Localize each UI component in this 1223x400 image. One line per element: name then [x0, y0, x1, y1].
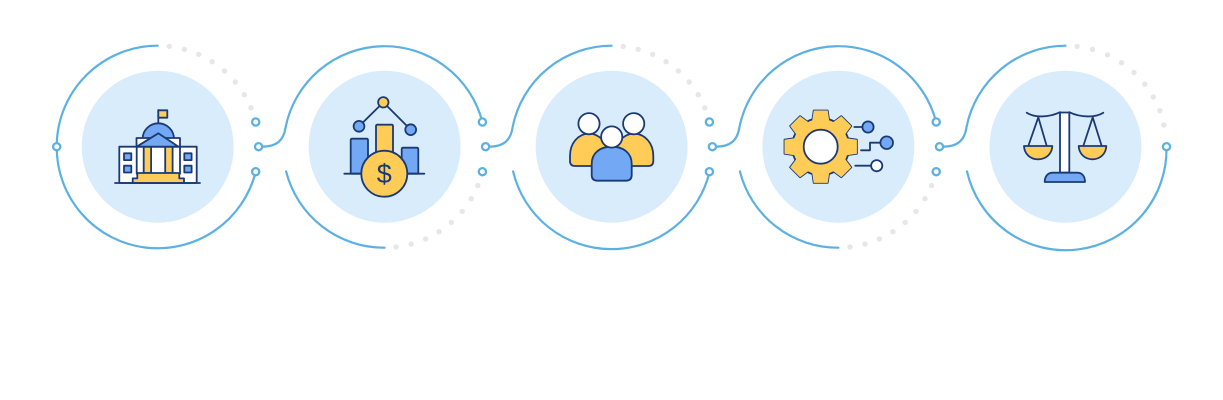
panel: step 4 gear with circuit nodes [709, 46, 940, 250]
background disc 1 [82, 71, 234, 223]
icon: balance scales [1024, 112, 1106, 182]
icon: group of people [570, 113, 653, 181]
background disc 4 [762, 71, 914, 223]
panel: step 3 people group [482, 44, 713, 249]
background disc 5 [990, 71, 1142, 223]
icon: chart with dollar coin [344, 97, 424, 197]
background disc 3 [536, 71, 688, 223]
outline ring 5 [936, 44, 1170, 250]
outline ring 2 [255, 46, 486, 250]
icon: government building [115, 110, 200, 183]
outline ring 1 [53, 44, 259, 248]
panel: step 2 finance chart [255, 46, 486, 250]
panel: step 5 balance scales [936, 44, 1170, 250]
panel: step 1 government building [53, 44, 259, 248]
background disc 2 [309, 71, 461, 223]
outline ring 4 [709, 46, 940, 250]
outline ring 3 [482, 44, 713, 249]
icon: chart with dollar coin: $ [377, 159, 392, 189]
icon: gear and circuit nodes [784, 110, 893, 183]
